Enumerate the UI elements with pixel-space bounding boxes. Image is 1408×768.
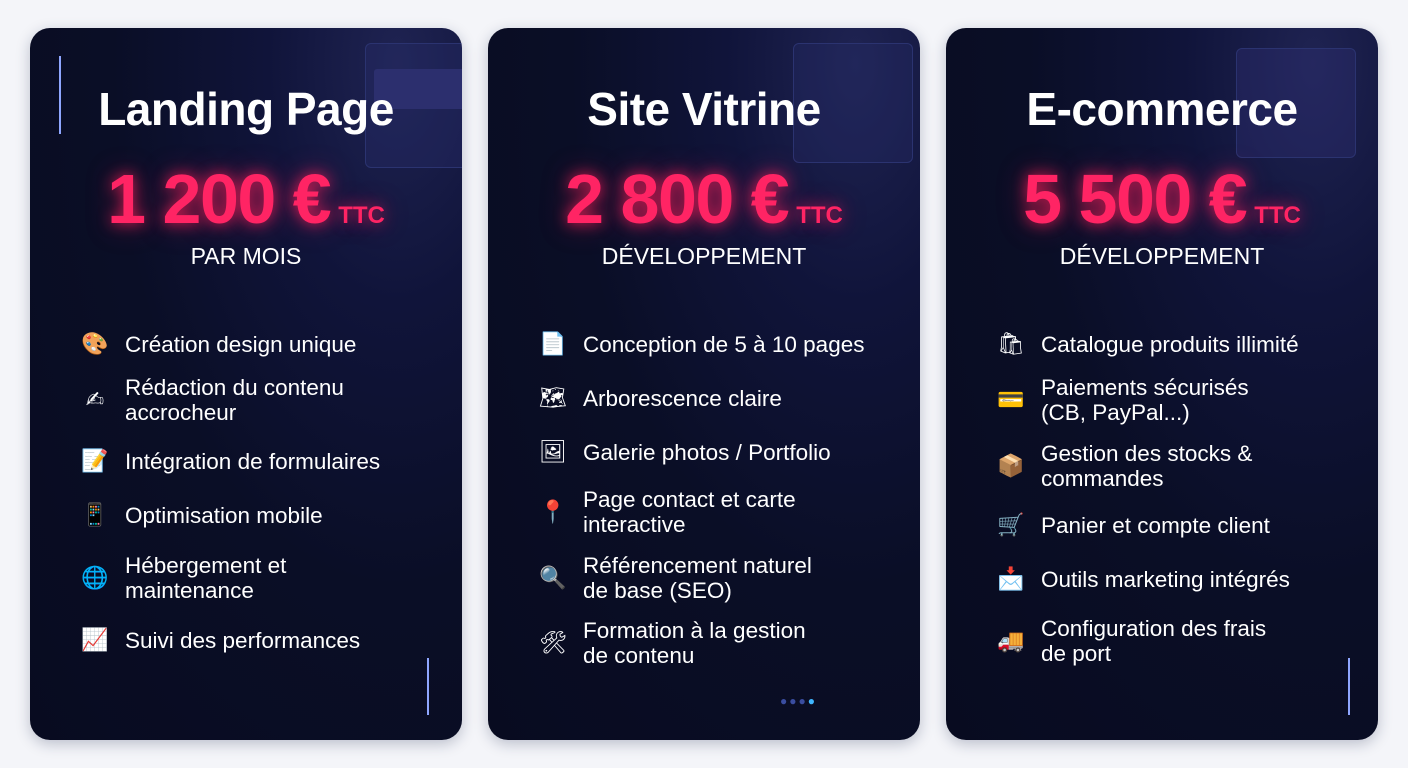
item: contact: interactive (583, 512, 686, 537)
item: stocks: 📦 (997, 454, 1025, 478)
item: panier: 🛒 (997, 513, 1025, 538)
item: livraison: Configuration des frais (1041, 616, 1266, 641)
item: seo: Référencement naturel (583, 553, 812, 578)
item: livraison: 🚚 (997, 628, 1025, 654)
heading: Landing Page (98, 83, 394, 135)
item: galerie: 🖼 (539, 440, 567, 465)
item: stocks: commandes (1041, 466, 1164, 491)
panel: landing page (30, 28, 462, 740)
item: redaction: Rédaction du contenu (125, 375, 344, 400)
item: hebergement: 🌐 (81, 566, 109, 590)
decoration: browser mockup (365, 43, 475, 168)
decoration: code window (793, 43, 913, 163)
item: formation (539, 618, 806, 668)
panel: site vitrine (488, 28, 920, 740)
item: paiements: 💳 (997, 388, 1025, 412)
item: contact: Page contact et carte (583, 487, 796, 512)
decoration: bottom line (427, 658, 429, 715)
item: seo: 🔍 (539, 566, 567, 590)
item: paiements (997, 375, 1249, 425)
item: performances: Suivi des performances (125, 628, 360, 653)
item: marketing: 📩 (997, 567, 1025, 592)
price: 1 200 € TTC (107, 160, 385, 238)
item: arborescence: 🗺 (539, 386, 567, 411)
item: panier: Panier et compte client (1041, 513, 1270, 538)
heading: Site Vitrine (587, 83, 821, 135)
item: catalogue: 🛍 (997, 332, 1025, 357)
item: stocks (997, 441, 1252, 491)
decoration: dots: ●●●● (780, 694, 817, 708)
item: formulaires: Intégration de formulaires (125, 449, 380, 474)
item: hebergement: Hébergement et (125, 553, 286, 578)
subtitle: PAR MOIS (191, 243, 301, 269)
item: paiements: (CB, PayPal...) (1041, 400, 1190, 425)
item: redaction: accrocheur (125, 400, 236, 425)
item: conception: Conception de 5 à 10 pages (583, 332, 864, 357)
item: formation: 🛠 (539, 630, 567, 656)
item: redaction: ✍ (86, 388, 104, 412)
item: design: 🎨 (81, 332, 109, 357)
item: formulaires: 📝 (81, 449, 109, 474)
item: livraison (997, 616, 1266, 666)
heading: E-commerce (1026, 83, 1298, 135)
price: 2 800 € TTC (565, 160, 843, 238)
item: performances: 📈 (81, 628, 109, 653)
item: mobile: Optimisation mobile (125, 503, 323, 528)
item: mobile: 📱 (81, 503, 109, 528)
item: marketing: Outils marketing intégrés (1041, 567, 1290, 592)
item: catalogue: Catalogue produits illimité (1041, 332, 1299, 357)
item: livraison: de port (1041, 641, 1111, 666)
item: hebergement: maintenance (125, 578, 254, 603)
item: conception: 📄 (539, 332, 567, 357)
item: seo (539, 553, 812, 603)
item: stocks: Gestion des stocks & (1041, 441, 1252, 466)
item: formation: de contenu (583, 643, 694, 668)
decoration: vertical line (59, 56, 61, 134)
decoration: bottom line (1348, 658, 1350, 715)
item: hebergement (81, 553, 286, 603)
item: formation: Formation à la gestion (583, 618, 806, 643)
decoration: screen (1236, 48, 1356, 158)
item: redaction (86, 375, 344, 425)
item: design: Création design unique (125, 332, 356, 357)
item: galerie: Galerie photos / Portfolio (583, 440, 831, 465)
subtitle: DÉVELOPPEMENT (602, 243, 806, 269)
item: contact (539, 487, 796, 537)
price: 5 500 € TTC (1023, 160, 1301, 238)
item: paiements: Paiements sécurisés (1041, 375, 1249, 400)
subtitle: DÉVELOPPEMENT (1060, 243, 1264, 269)
item: seo: de base (SEO) (583, 578, 732, 603)
item: contact: 📍 (539, 500, 567, 524)
item: arborescence: Arborescence claire (583, 386, 782, 411)
panel: e-commerce (946, 28, 1378, 740)
